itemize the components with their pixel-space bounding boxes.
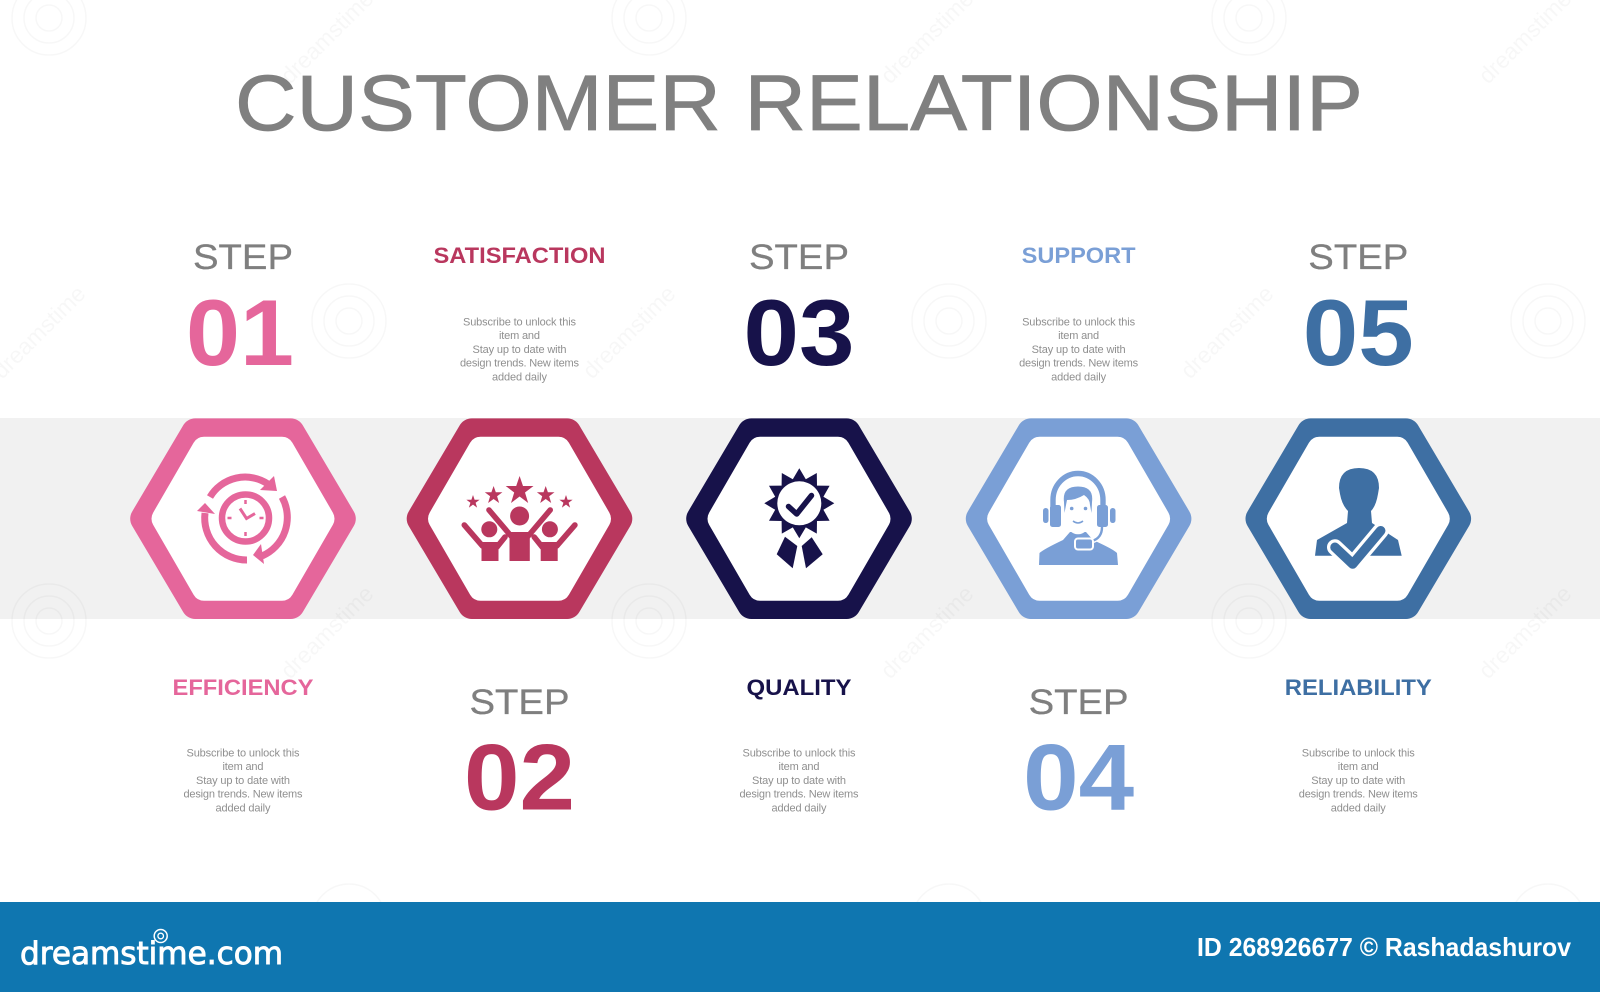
title: CUSTOMER RELATIONSHIP [235, 58, 1363, 147]
description 5: item and [1338, 761, 1379, 773]
description 1: Stay up to date with [196, 775, 290, 787]
hexagon 4 [980, 432, 1177, 605]
description 3: Subscribe to unlock this [742, 748, 856, 760]
description 4: Stay up to date with [1032, 344, 1126, 356]
icon: cheering people with stars [464, 476, 575, 561]
description 4: item and [1058, 330, 1099, 342]
icon: person with checkmark [1315, 468, 1402, 564]
description 4: added daily [1051, 371, 1107, 383]
hexagon 1 [144, 432, 342, 605]
description 3: Stay up to date with [752, 775, 846, 787]
icon: support agent with headset [1039, 474, 1118, 565]
step 5 number: 05 [1303, 280, 1414, 385]
description 3: item and [778, 761, 820, 773]
description 3: added daily [772, 802, 827, 814]
hexagon 3 [700, 432, 898, 605]
grey band behind hexagons [0, 418, 1600, 619]
panel: step 1 efficiency [144, 238, 342, 814]
panel: step 5 reliability [1260, 238, 1457, 814]
description 1 [184, 748, 303, 814]
panel: step 4 support [980, 243, 1177, 830]
step 3 heading: STEP [749, 238, 849, 277]
step 1 heading: STEP [193, 238, 293, 277]
step 2 heading: STEP [470, 683, 570, 722]
description 4: design trends. New items [1019, 358, 1139, 370]
panel: step 2 satisfaction [421, 243, 618, 830]
label: reliability: RELIABILITY [1285, 675, 1432, 700]
label: support: SUPPORT [1022, 243, 1136, 268]
description 4: Subscribe to unlock this [1022, 316, 1136, 328]
description 5: design trends. New items [1299, 789, 1418, 801]
text: dreamstime [875, 580, 978, 684]
description 1: Subscribe to unlock this [186, 748, 300, 760]
description 5: Subscribe to unlock this [1302, 748, 1415, 760]
description 2: design trends. New items [460, 358, 580, 370]
footer bar [0, 902, 1600, 992]
step 1 number: 01 [186, 280, 294, 385]
label: quality: QUALITY [746, 675, 852, 700]
description 5: Stay up to date with [1311, 775, 1405, 787]
hexagon 5 [1260, 432, 1457, 605]
footer credit: ID 268926677 © Rashadashurov [1197, 932, 1572, 962]
text: dreamstime [1175, 280, 1278, 384]
step 4 heading: STEP [1029, 683, 1129, 722]
description 2 [460, 316, 580, 383]
description 3: design trends. New items [740, 789, 859, 801]
description 2: Subscribe to unlock this [463, 316, 576, 328]
description 3 [740, 748, 859, 814]
description 4 [1019, 316, 1139, 383]
description 5: added daily [1331, 802, 1386, 814]
footer logo: dreamstime.com [20, 936, 283, 972]
hexagon 2 [421, 432, 618, 605]
description 2: added daily [492, 371, 548, 383]
text: dreamstime [577, 280, 680, 384]
description 2: Stay up to date with [472, 344, 566, 356]
description 1: item and [222, 761, 264, 773]
step 2 number: 02 [464, 724, 575, 830]
icon: clock with circular arrows [197, 476, 287, 564]
description 1: design trends. New items [184, 789, 303, 801]
icon: award rosette [764, 468, 834, 568]
text: dreamstime [275, 580, 378, 684]
step 4 number: 04 [1023, 724, 1134, 830]
description 5 [1299, 748, 1418, 814]
step 3 number: 03 [744, 280, 854, 385]
label: efficiency: EFFICIENCY [172, 675, 314, 700]
text: dreamstime [1473, 580, 1576, 684]
panel: step 3 quality [700, 238, 898, 814]
label: satisfaction: SATISFACTION [434, 243, 606, 268]
description 1: added daily [216, 802, 271, 814]
step 5 heading: STEP [1308, 238, 1408, 277]
description 2: item and [499, 330, 540, 342]
